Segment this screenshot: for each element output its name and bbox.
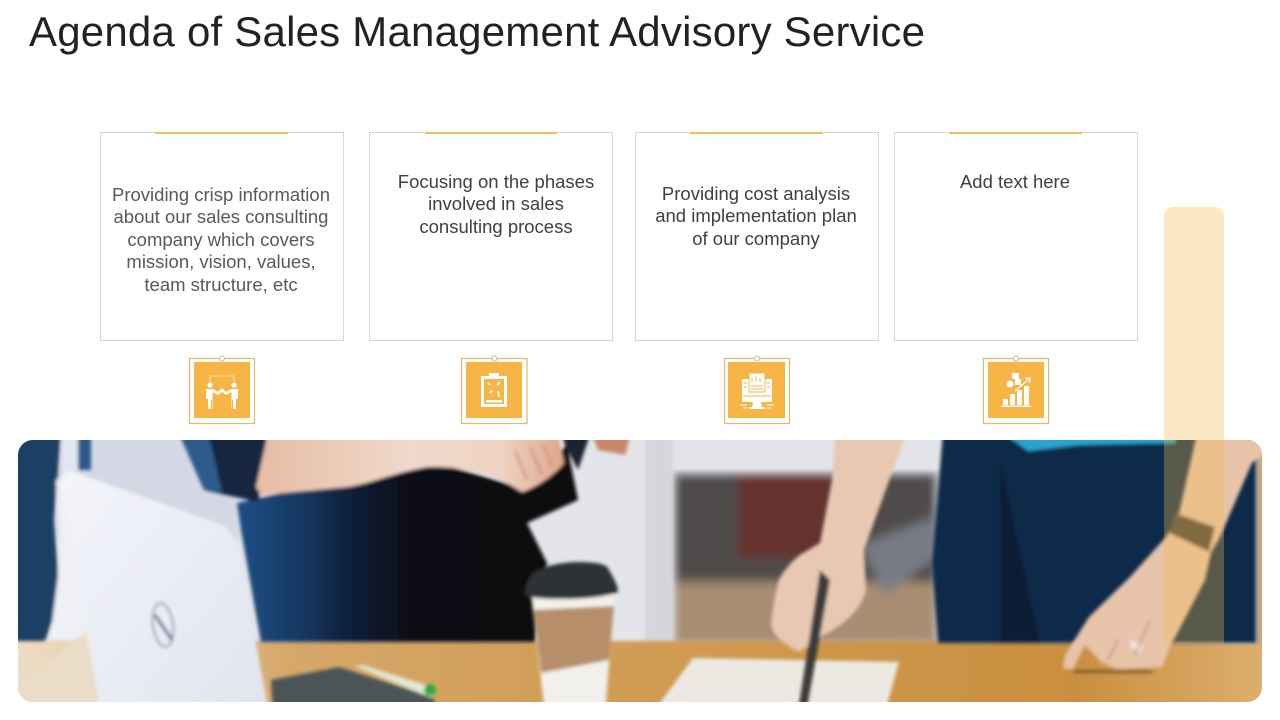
card 3 text: of our company (692, 228, 820, 249)
panel: card 1 outline (100, 132, 344, 341)
paper (658, 656, 901, 702)
card 1 text: mission, vision, values, (126, 251, 316, 272)
panel: card 3 outline (635, 132, 879, 341)
icon: growth bar chart (982, 356, 1050, 424)
card 2 text: consulting process (419, 216, 573, 237)
table (18, 632, 1262, 702)
vertical translucent band (1164, 207, 1224, 644)
card 1 text: about our sales consulting (114, 206, 328, 227)
pants and shirt right person (932, 420, 1256, 643)
card 2 text: involved in sales (428, 193, 564, 214)
card 4 accent (949, 132, 1082, 134)
card 1 text: company which covers (127, 229, 315, 250)
title: Agenda of Sales Management Advisory Service (29, 8, 925, 55)
laptop (61, 470, 272, 720)
arms right person (769, 440, 1262, 702)
panel: card 4 outline (894, 132, 1138, 341)
icon: monitor with report (724, 356, 790, 424)
card 2 accent (425, 132, 557, 134)
card 3 text: Providing cost analysis (662, 183, 850, 204)
photo: office desk scene with laptop, coffee cup and two people (18, 440, 1262, 702)
card 3 accent (690, 132, 823, 134)
card 3 text: and implementation plan (655, 205, 857, 226)
icon: clipboard (460, 356, 528, 424)
icon: two people with presentation board (188, 356, 256, 424)
card 1 text: team structure, etc (144, 274, 298, 295)
background (18, 440, 1254, 644)
card 2 text: Focusing on the phases (398, 171, 594, 192)
card 1 text (112, 184, 330, 295)
card 1 accent (155, 132, 288, 134)
tablet and marker (268, 662, 439, 702)
card 3 text (655, 183, 857, 249)
card 1 text: Providing crisp information (112, 184, 330, 205)
panel: card 2 outline (369, 132, 613, 341)
card 4 text: Add text here (960, 171, 1070, 192)
coffee cup (525, 562, 618, 720)
body and arm left person (173, 420, 632, 642)
card 2 text (398, 171, 594, 237)
